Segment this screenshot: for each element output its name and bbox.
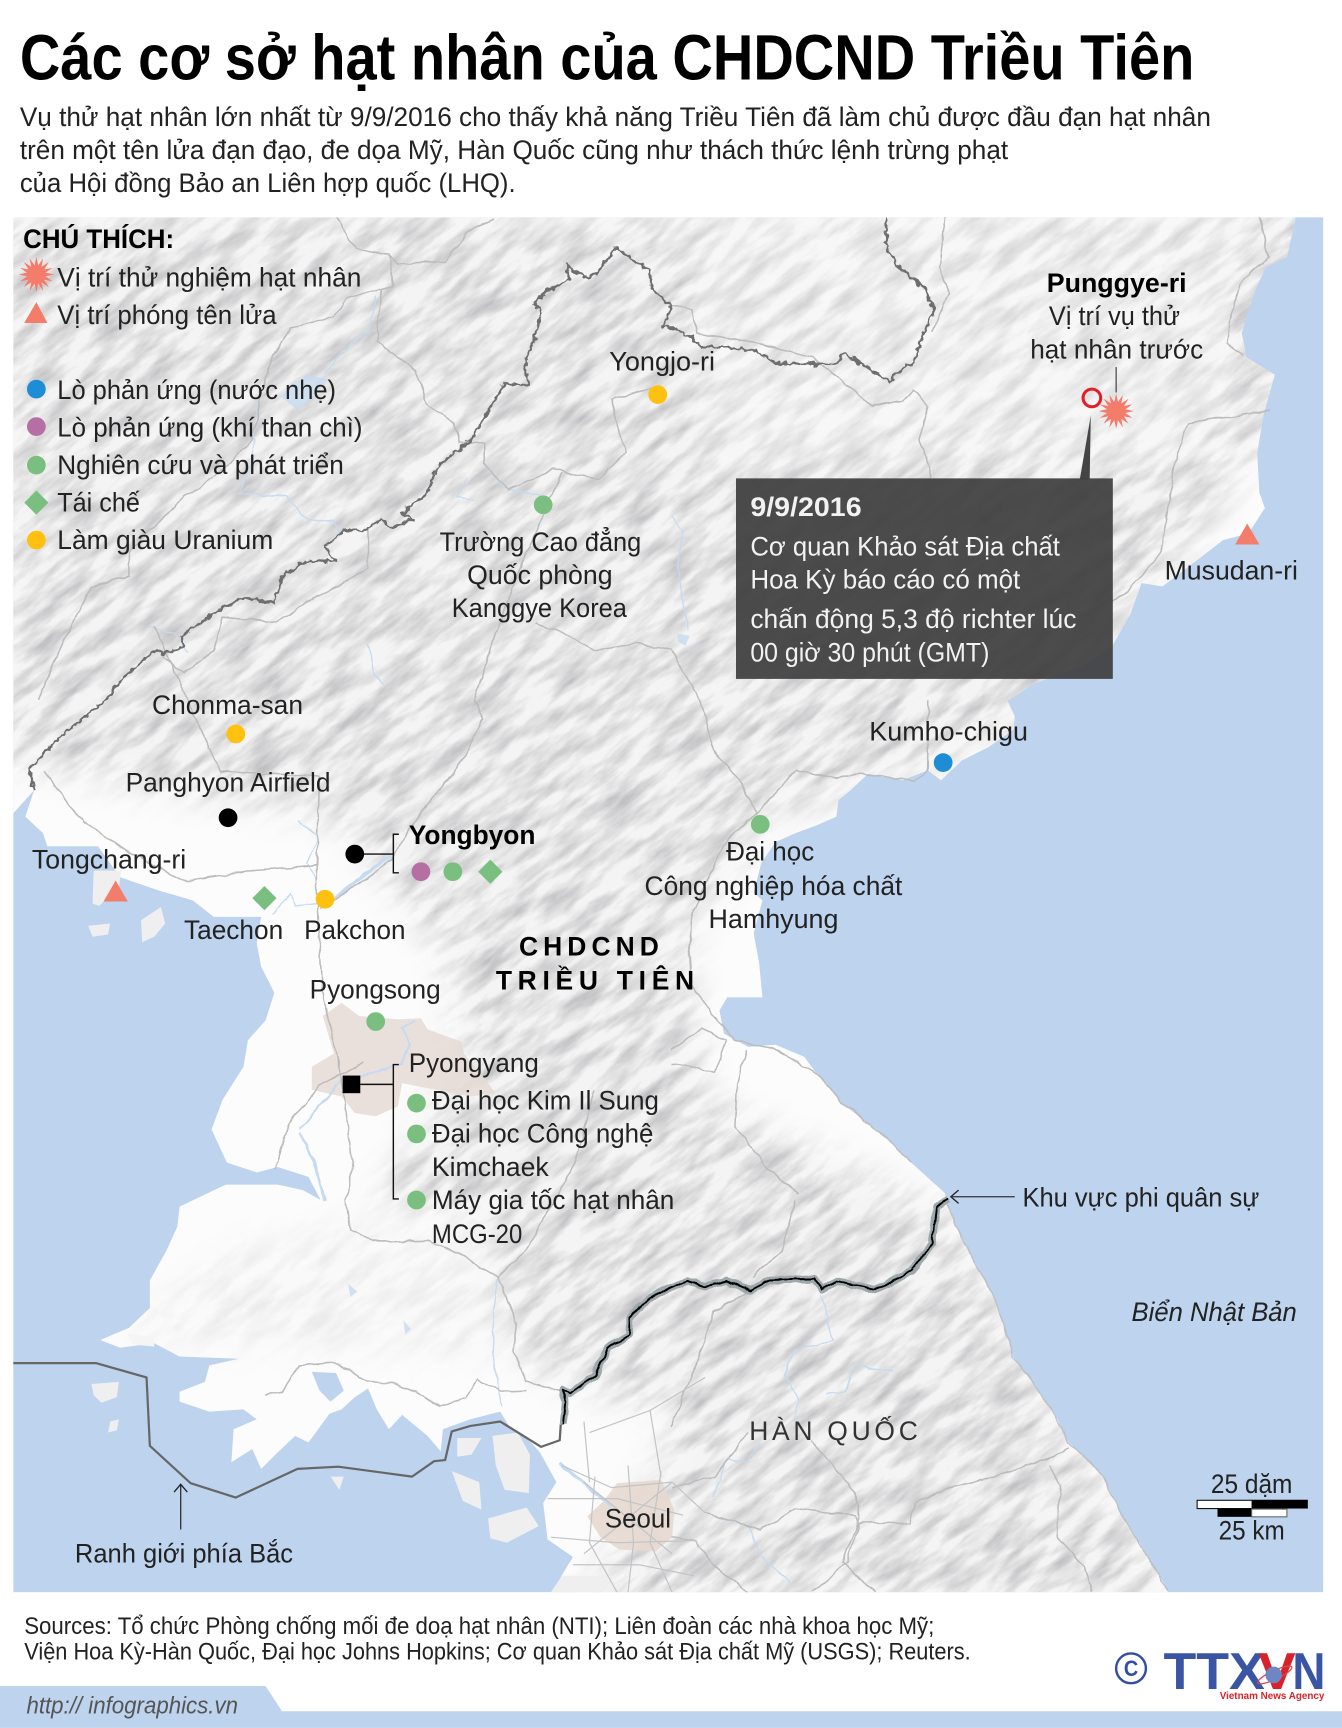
west bay (312, 1372, 344, 1402)
sources (24, 1613, 971, 1666)
site: Yongbyon (345, 820, 535, 884)
site: Pyongsong: Pyongsong (310, 974, 441, 1004)
site: Tongchang-ri (32, 844, 186, 901)
site: Pyongyang: Đại học Công nghệ (432, 1119, 653, 1149)
legend: nuclear test site: Vị trí thử nghiệm hạt nhân (57, 263, 361, 293)
site: Pakchon (304, 890, 405, 945)
rivers (150, 297, 892, 1583)
Seoul urban area (587, 1480, 674, 1552)
title: Các cơ sở hạt nhân của CHDCND Triều Tiên (20, 22, 1194, 94)
site: Yongjo-ri: Yongjo-ri (609, 346, 715, 376)
legend: research: Nghiên cứu và phát triển (57, 450, 344, 480)
sources: Viện Hoa Kỳ-Hàn Quốc, Đại học Johns Hopkins; Cơ quan Khảo sát Địa chất Mỹ (USGS); Reuters. (24, 1639, 971, 1666)
footer url: http:// infographics.vn (26, 1692, 238, 1719)
sources: Sources: Tổ chức Phòng chống mối đe doạ hạt nhân (NTI); Liên đoàn các nhà khoa học Mỹ; (24, 1613, 934, 1640)
legend: reprocessing (24, 487, 140, 517)
site: Chonma-san: Chonma-san (152, 690, 303, 720)
Northern Limit Line (13, 1363, 561, 1498)
callout: 9/9/2016: Cơ quan Khảo sát Địa chất (750, 531, 1061, 561)
Pyongyang urban area (312, 1003, 496, 1116)
site: Kanggye college: Quốc phòng (467, 560, 613, 590)
subtitle: của Hội đồng Bảo an Liên hợp quốc (LHQ). (20, 168, 516, 198)
site: Yongjo-ri (609, 346, 715, 404)
callout: 9/9/2016: Hoa Kỳ báo cáo có một (750, 565, 1021, 595)
site: Hamhung chemical university: Công nghiệp hóa chất (645, 871, 903, 901)
sea (13, 217, 1323, 1592)
site: Panghyon Airfield (126, 767, 331, 827)
site: Kanggye college: Kanggye Korea (452, 593, 627, 623)
site: Pakchon: Pakchon (304, 915, 405, 945)
logo: TTXVN: TTX (1164, 1642, 1265, 1700)
site: Pyongyang: Máy gia tốc hạt nhân (432, 1185, 674, 1215)
site: Hamhung chemical university (645, 815, 903, 934)
site: Pyongyang (343, 1048, 674, 1249)
subtitle: trên một tên lửa đạn đạo, đe dọa Mỹ, Hàn Quốc cũng như thách thức lệnh trừng phạt (20, 135, 1009, 165)
logo: TTXVN: V (1258, 1642, 1296, 1700)
site: Punggye-ri: hạt nhân trước (1030, 334, 1203, 364)
logo: TTXVN: C (1124, 1656, 1138, 1681)
DMZ (562, 1200, 949, 1424)
Korea/China border (30, 217, 934, 790)
callout: 9/9/2016: chấn động 5,3 độ richter lúc (750, 604, 1076, 634)
site: Chonma-san (152, 690, 303, 743)
site: Kumho-chigu: Kumho-chigu (869, 717, 1028, 747)
site: Taechon: Taechon (184, 915, 283, 945)
site: Yongbyon: Yongbyon (409, 820, 535, 850)
legend: light water reactor: Lò phản ứng (nước nhẹ) (57, 375, 336, 405)
callout: 9/9/2016 (736, 416, 1113, 679)
site: Punggye-ri (1030, 268, 1203, 429)
site: Taechon (184, 886, 283, 945)
site: Tongchang-ri: Tongchang-ri (32, 844, 186, 874)
callout: Northern Limit Line with arrow: Ranh giới phía Bắc (75, 1539, 293, 1569)
subtitle (20, 102, 1211, 198)
city label: Seoul: Seoul (605, 1503, 671, 1533)
site: Pyongyang: MCG-20 (432, 1219, 522, 1249)
country label: DPRK: TRIỀU TIÊN (496, 966, 694, 996)
subtitle: Vụ thử hạt nhân lớn nhất từ 9/9/2016 cho thấy khả năng Triều Tiên đã làm chủ được đầu đạn hạt nhân (20, 102, 1211, 132)
legend: reprocessing: Tái chế (57, 487, 140, 517)
map panel (13, 217, 1323, 1592)
logo: TTXVN (1116, 1642, 1325, 1702)
land (13, 217, 1296, 1592)
legend: missile launch site: Vị trí phóng tên lửa (57, 300, 277, 330)
country label: South Korea: HÀN QUỐC (749, 1416, 918, 1446)
callout: Northern Limit Line with arrow (75, 1484, 293, 1569)
islands (88, 871, 617, 1592)
legend: graphite reactor: Lò phản ứng (khí than chì) (57, 412, 362, 442)
callout: 9/9/2016: 9/9/2016 (750, 492, 862, 522)
legend heading: CHÚ THÍCH: (23, 224, 174, 254)
site: Punggye-ri: Vị trí vụ thử (1049, 301, 1180, 331)
callout: DMZ with arrow: Khu vực phi quân sự (1022, 1183, 1259, 1213)
site: Pyongsong (310, 974, 441, 1031)
terrain shading (13, 217, 1323, 1592)
site: Pyongyang: Kimchaek (432, 1152, 549, 1182)
logo: TTXVN: N (1292, 1642, 1325, 1700)
country label: DPRK: CHDCND (519, 931, 659, 961)
logo: TTXVN: Vietnam News Agency (1220, 1691, 1325, 1702)
scale bar: 25 dặm (1211, 1469, 1292, 1499)
legend: uranium enrichment: Làm giàu Uranium (57, 525, 273, 555)
site: Pyongyang: Đại học Kim Il Sung (432, 1086, 659, 1116)
footer band (0, 1686, 1342, 1728)
site: Kumho-chigu (869, 717, 1028, 772)
Seoul road network (548, 1377, 705, 1592)
site: Kanggye college: Trường Cao đẳng (440, 526, 641, 557)
site: Hamhung chemical university: Hamhyung (708, 904, 838, 934)
site: Musudan-ri (1165, 524, 1298, 586)
site: Kanggye college (440, 495, 641, 623)
site: Hamhung chemical university: Đại học (726, 837, 814, 867)
legend (19, 224, 362, 555)
site: Musudan-ri: Musudan-ri (1165, 556, 1298, 586)
scale bar: 25 km (1219, 1515, 1285, 1545)
site: Panghyon Airfield: Panghyon Airfield (126, 767, 331, 797)
province borders (39, 217, 1270, 1592)
country label: DPRK (496, 931, 694, 996)
callout: 9/9/2016: 00 giờ 30 phút (GMT) (750, 637, 989, 667)
scale bar (1197, 1469, 1308, 1545)
site: Punggye-ri: Punggye-ri (1047, 268, 1187, 298)
site: Pyongyang: Pyongyang (409, 1048, 539, 1078)
sea label: Biển Nhật Bản (1132, 1297, 1297, 1327)
